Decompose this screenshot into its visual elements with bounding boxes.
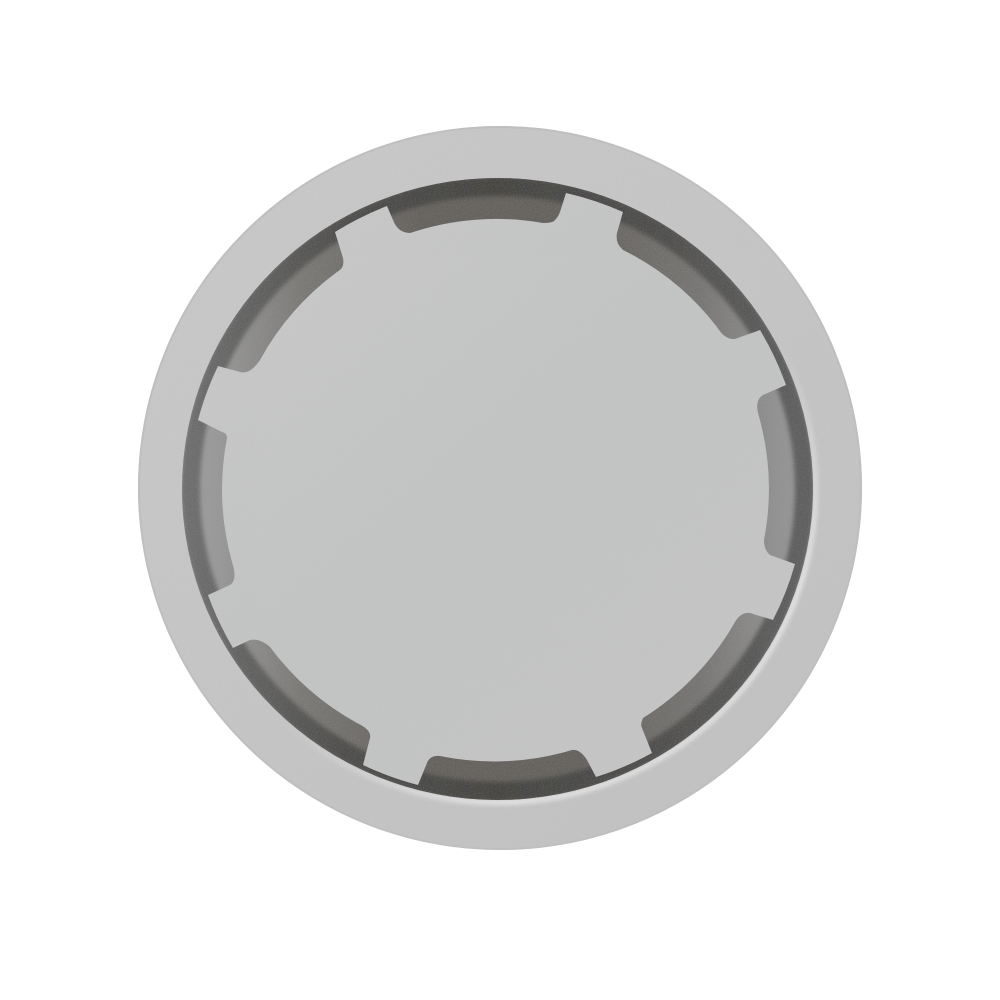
inner plate with eight lugs bbox=[198, 193, 795, 785]
illustration: machined metal disc bbox=[138, 126, 862, 850]
recessed groove bbox=[170, 165, 830, 815]
surface grain bbox=[184, 178, 813, 803]
outer metal ring bbox=[138, 126, 862, 850]
